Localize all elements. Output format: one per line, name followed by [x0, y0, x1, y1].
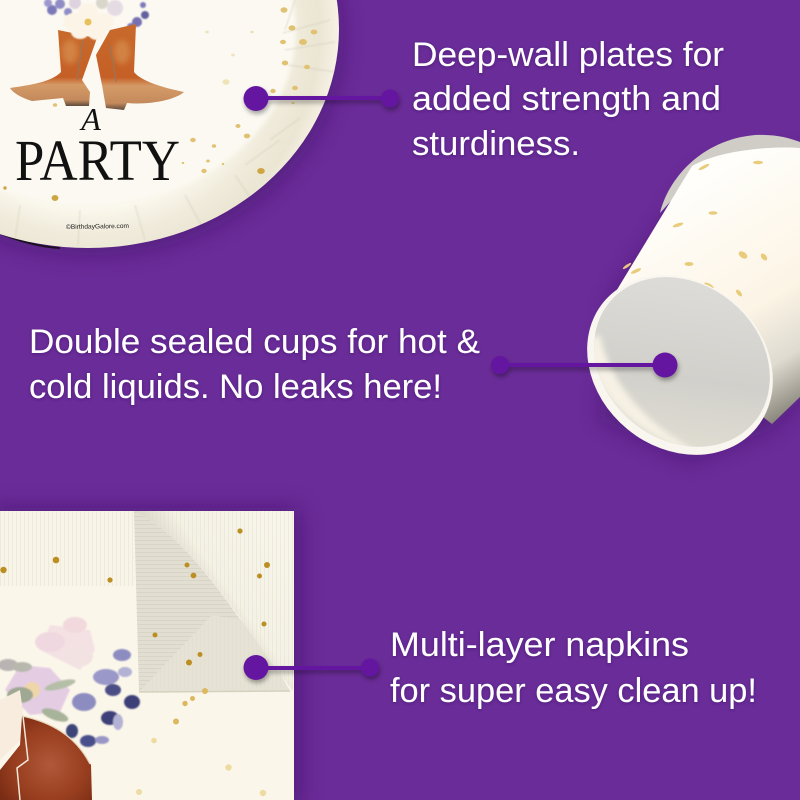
text: plates caption: sturdiness. — [412, 125, 580, 163]
text: napkins caption: for super easy clean up! — [390, 672, 757, 710]
cup base — [551, 238, 800, 492]
gold confetti on cup — [622, 161, 768, 297]
napkin inner fold — [134, 511, 240, 692]
text: plates caption — [412, 36, 724, 163]
plate wordmark — [16, 109, 179, 180]
plate wordmark: A — [79, 101, 101, 137]
cup body — [612, 148, 800, 424]
text: napkins caption — [390, 626, 757, 710]
panel: napkin photo — [0, 508, 300, 800]
cup rim — [660, 135, 800, 213]
plate copyright: ©BirthdayGalore.com — [66, 222, 129, 231]
text: cups caption: Double sealed cups for hot & — [29, 323, 480, 361]
text: plates caption: added strength and — [412, 80, 721, 118]
text: napkins caption: Multi-layer napkins — [390, 626, 689, 664]
text: plates caption: Deep-wall plates for — [412, 36, 724, 74]
connector: napkins — [244, 655, 379, 680]
gold confetti on napkin — [0, 528, 270, 796]
connector: plates — [244, 86, 399, 111]
connector: cups — [491, 352, 678, 378]
text: cups caption: cold liquids. No leaks here! — [29, 368, 442, 406]
napkin corner flap — [134, 511, 293, 691]
plate wordmark: PARTY — [15, 128, 180, 193]
panel: cup photo — [587, 134, 800, 464]
icon: boots and bouquet — [10, 0, 184, 110]
text: cups caption — [29, 323, 480, 406]
icon: napkin bouquet and boot — [0, 617, 140, 800]
gold confetti on plate — [3, 7, 317, 201]
panel: plate photo — [0, 0, 343, 255]
